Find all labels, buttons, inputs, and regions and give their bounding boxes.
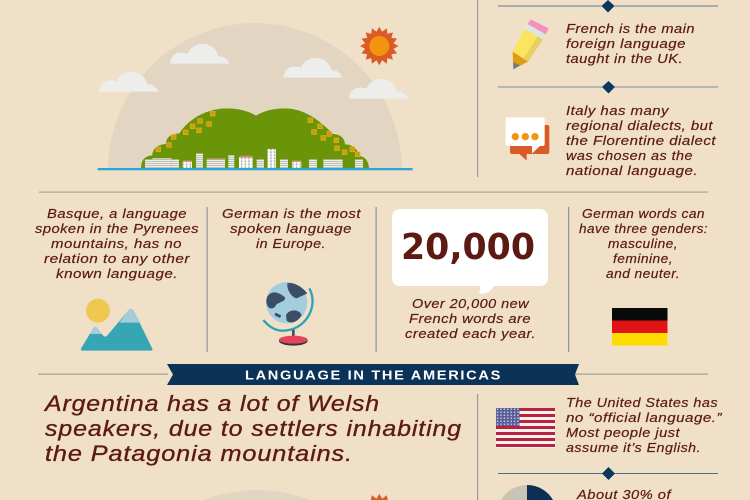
clouds [99,44,408,99]
text: German genders: have three genders: [579,222,708,236]
heading: Argentina fact: Argentina has a lot of Welsh [43,391,380,416]
text: German genders [579,207,708,281]
text: Basque fact [35,207,199,281]
icon: mountains and sun [81,299,152,351]
text: US fact: no “official language.” [566,411,722,425]
text: Italy fact: national language. [566,164,698,178]
column divider top right [477,0,478,177]
text: Italy fact [566,104,716,178]
text: German most spoken: German is the most [222,207,361,221]
heading: Argentina fact: speakers, due to settlers inhabiting [45,416,462,441]
divider with diamond [498,0,718,12]
text: French new words: created each year. [405,327,536,341]
heading: Argentina fact [43,391,462,466]
callout: 20,000 bubble: 20,000 [401,227,535,268]
icon: speech bubbles [506,117,549,161]
divider with diamond [498,467,718,480]
icon: pencil [513,19,549,69]
text: Basque fact: known language. [56,267,178,281]
icon: globe [263,282,313,346]
text: German genders: and neuter. [606,267,680,281]
column divider [376,207,377,352]
text: French fact [566,22,695,66]
text: French new words: French words are [409,312,531,326]
text: French new words [405,297,536,341]
text: Italy fact: the Florentine dialect [566,134,716,148]
arch backdrop [108,23,402,170]
text: Basque fact: mountains, has no [51,237,182,251]
text: French fact: taught in the UK. [566,52,683,66]
icon: German flag [612,308,668,346]
text: German genders: feminine, [613,252,673,266]
text: Basque fact: Basque, a language [47,207,187,221]
illustration: green hill city under a sun [98,23,413,170]
text: German most spoken [222,207,361,251]
text: Basque fact: spoken in the Pyrenees [35,222,199,236]
text: French fact: French is the main [566,22,695,36]
text: Italy fact: was chosen as the [566,149,693,163]
column divider [568,207,569,352]
text: US fact: The United States has [566,396,718,410]
divider with diamond [498,81,718,94]
text: US fact: assume it’s English. [566,441,701,455]
text: Italy fact: regional dialects, but [566,119,713,133]
banner: language in the Americas [38,364,708,385]
icon: sun [360,27,399,65]
text: US fact [566,396,722,455]
text: Basque fact: relation to any other [44,252,190,266]
section rule [39,192,708,193]
green hill with buildings and water [98,108,413,170]
text: US fact: Most people just [566,426,680,440]
text: German genders: German words can [582,207,705,221]
illustration: second hill scene (cropped) [204,490,388,500]
text: German genders: masculine, [608,237,678,251]
text: French fact: foreign language [566,37,686,51]
text: German most spoken: in Europe. [256,237,326,251]
column divider [206,207,208,352]
text: Italy fact: Italy has many [566,104,669,118]
banner: language in the Americas: LANGUAGE IN THE AMERICAS [245,368,502,382]
callout: 20,000 bubble [392,209,548,294]
chart: 30% pie [501,485,553,500]
icon: US flag [496,408,555,448]
heading: Argentina fact: the Patagonia mountains. [45,441,353,466]
text: German most spoken: spoken language [230,222,352,236]
text: French new words: Over 20,000 new [412,297,530,311]
column divider [477,394,478,500]
